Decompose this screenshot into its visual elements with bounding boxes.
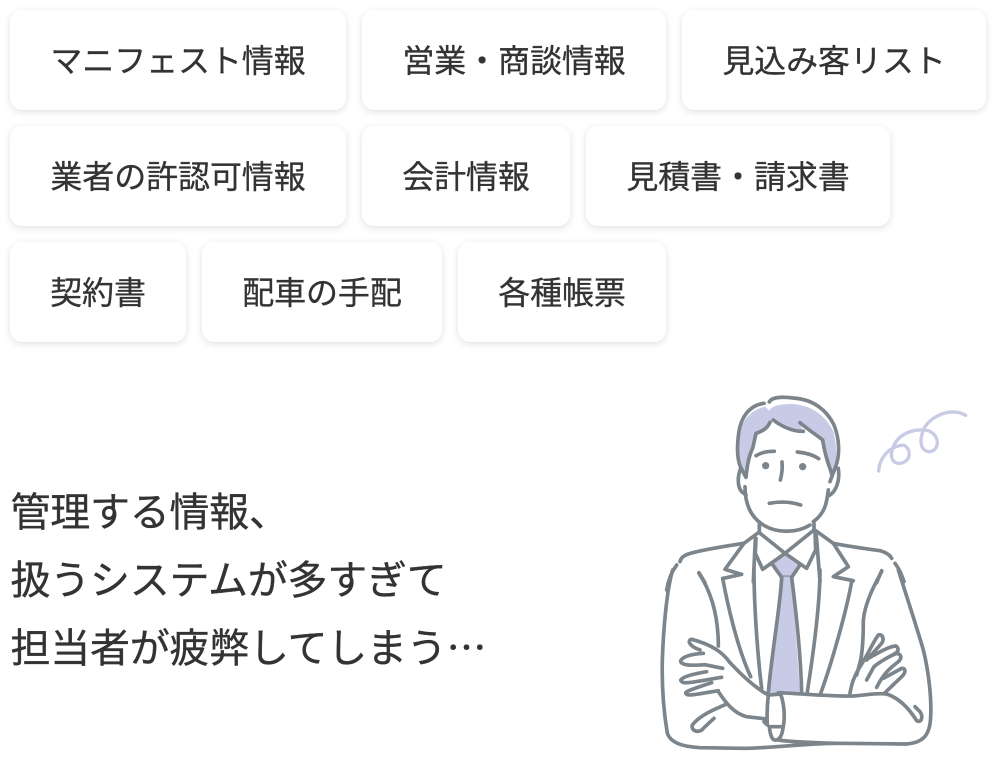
tag: contracts: 契約書 [50,268,146,314]
message text: 担当者が疲弊してしまう… [10,616,486,674]
message text: 管理する情報、 [10,480,289,538]
tag: vehicle dispatch: 配車の手配 [242,268,402,314]
tag: prospect list: 見込み客リスト [722,36,946,82]
tag: accounting info: 会計情報 [402,152,530,198]
tag: sales info: 営業・商談情報 [402,36,626,82]
tag: accounting info [362,126,570,226]
tag: quotes and invoices [586,126,890,226]
tag: sales info [362,10,666,110]
tag: quotes and invoices: 見積書・請求書 [626,152,850,198]
message text [10,480,486,674]
tag: manifest info: マニフェスト情報 [50,36,306,82]
tag: vendor permits: 業者の許認可情報 [50,152,306,198]
tag: forms: 各種帳票 [498,268,626,314]
head and collar [667,397,904,590]
tag: manifest info [10,10,346,110]
tag: forms [458,242,666,342]
tag: prospect list [682,10,986,110]
tag: vehicle dispatch [202,242,442,342]
tag: vendor permits [10,126,346,226]
message text: 扱うシステムが多すぎて [10,548,447,606]
icon: confusion squiggle [879,412,966,471]
body and crossed arms [662,570,931,748]
tag: contracts [10,242,186,342]
